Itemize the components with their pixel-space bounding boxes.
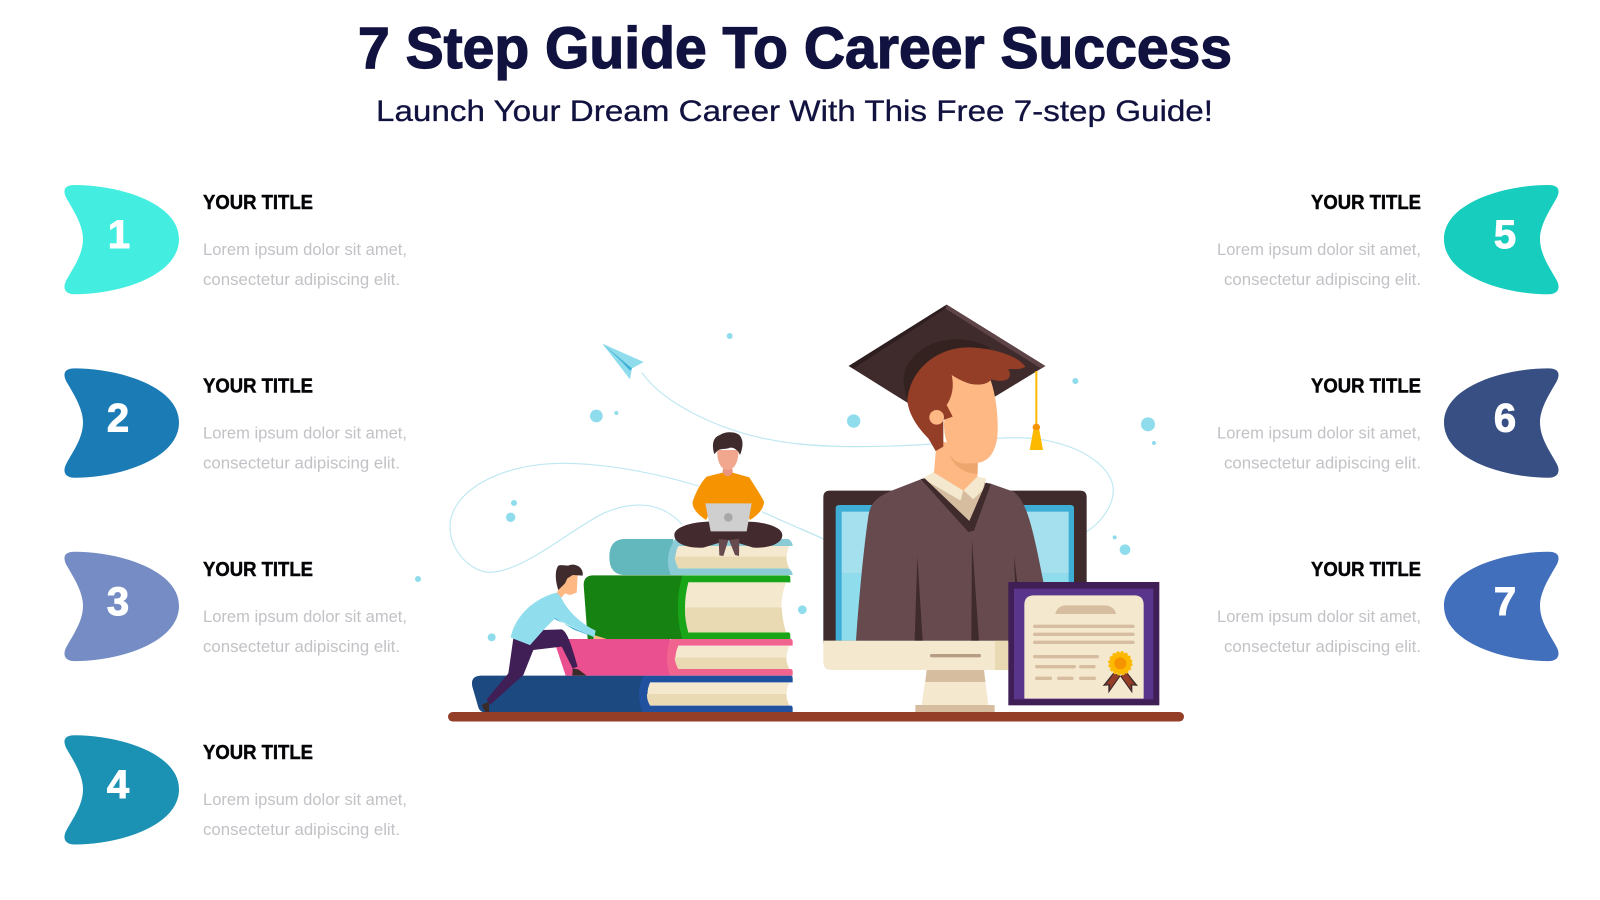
- diploma certificate: [1008, 582, 1159, 705]
- step 4: Lorem ipsum dolor sit amet,: [203, 790, 407, 809]
- step 3: Lorem ipsum dolor sit amet,: [203, 607, 407, 626]
- step 2: consectetur adipiscing elit.: [203, 453, 400, 472]
- illustration: books and students (left half): [415, 333, 830, 712]
- step 5: consectetur adipiscing elit.: [1224, 270, 1421, 289]
- shelf: [448, 712, 1184, 722]
- title: 7 Step Guide To Career Success: [358, 16, 1232, 81]
- step 6: YOUR TITLE: [1311, 375, 1421, 397]
- step 1: 1: [108, 213, 130, 257]
- step 7: Lorem ipsum dolor sit amet,: [1217, 607, 1421, 626]
- step 4: [64, 735, 407, 844]
- graduation gown: [856, 472, 1043, 641]
- subtitle: Launch Your Dream Career With This Free 7-step Guide!: [376, 95, 1213, 128]
- book: green: [584, 575, 790, 639]
- step 6: 6: [1494, 396, 1516, 440]
- swirl flight lines: [450, 373, 830, 572]
- step 1: [64, 185, 407, 294]
- swirl flight lines: [800, 438, 1113, 539]
- step 5: YOUR TITLE: [1311, 192, 1421, 214]
- step 3: YOUR TITLE: [203, 559, 313, 581]
- step 2: [64, 368, 407, 478]
- step 3: [64, 552, 407, 661]
- step 1: Lorem ipsum dolor sit amet,: [203, 240, 407, 259]
- step 6: Lorem ipsum dolor sit amet,: [1217, 423, 1421, 442]
- decorative dots: [415, 333, 807, 641]
- step 7: YOUR TITLE: [1311, 559, 1421, 581]
- step 5: [1217, 185, 1559, 294]
- step 3: consectetur adipiscing elit.: [203, 637, 400, 656]
- step 7: [1217, 552, 1559, 661]
- icon: paper plane: [602, 344, 644, 379]
- step 7: consectetur adipiscing elit.: [1224, 637, 1421, 656]
- book: blue: [472, 676, 793, 712]
- graduate head: [907, 347, 1025, 491]
- step 7: 7: [1494, 580, 1516, 624]
- graduation cap: [849, 305, 1045, 450]
- step 4: 4: [107, 763, 130, 807]
- monitor: [823, 491, 1087, 712]
- step 6: [1217, 368, 1559, 478]
- decorative dots: [847, 378, 1156, 555]
- book: pink: [556, 639, 793, 676]
- step 5: Lorem ipsum dolor sit amet,: [1217, 240, 1421, 259]
- step 1: YOUR TITLE: [203, 192, 313, 214]
- step 4: consectetur adipiscing elit.: [203, 820, 400, 839]
- step 3: 3: [107, 580, 129, 624]
- icon: award seal: [1103, 652, 1138, 693]
- step 5: 5: [1494, 213, 1516, 257]
- step 6: consectetur adipiscing elit.: [1224, 453, 1421, 472]
- book: teal: [609, 539, 793, 575]
- step 2: Lorem ipsum dolor sit amet,: [203, 423, 407, 442]
- figure: climbing student: [482, 565, 607, 712]
- figure: student with laptop: [674, 432, 782, 556]
- step 1: consectetur adipiscing elit.: [203, 270, 400, 289]
- step 2: 2: [107, 396, 129, 440]
- illustration: graduate, monitor and diploma (right half): [800, 305, 1159, 712]
- step 2: YOUR TITLE: [203, 375, 313, 397]
- step 4: YOUR TITLE: [203, 742, 313, 764]
